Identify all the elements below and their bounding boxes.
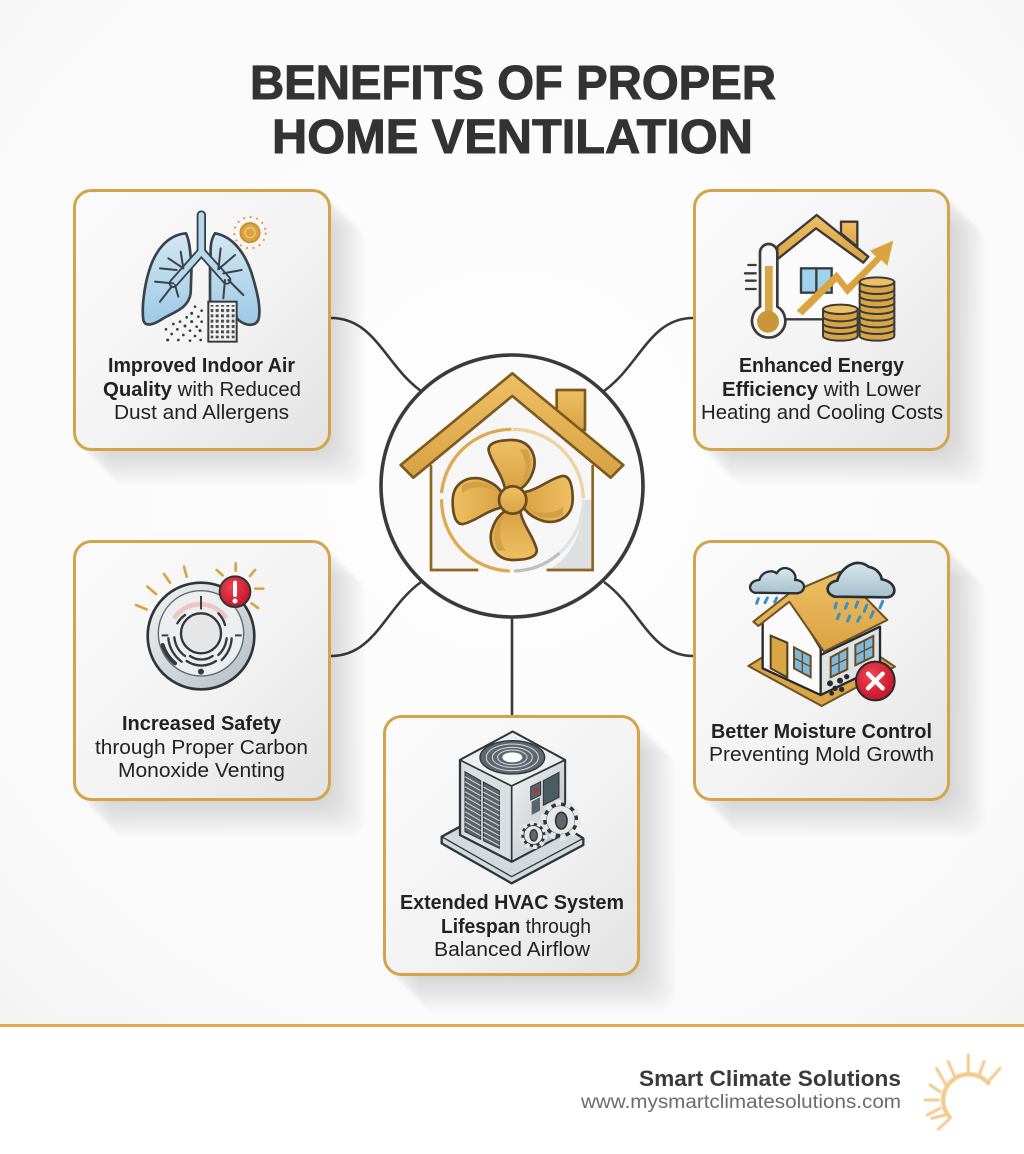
panel: better moisture control <box>694 542 985 836</box>
title: BENEFITS OF PROPER <box>250 57 776 110</box>
text: extended hvac lifespan: Balanced Airflow <box>434 939 591 961</box>
text: increased safety: Increased Safety <box>122 713 282 735</box>
text: enhanced energy efficiency: Efficiency with Lower <box>722 379 921 401</box>
footer url: www.mysmartclimatesolutions.com <box>580 1092 901 1113</box>
footer brand name: Smart Climate Solutions <box>639 1066 901 1091</box>
panel: enhanced energy efficiency <box>694 190 985 485</box>
icon: house in rain with warning <box>748 563 895 706</box>
text: better moisture control: Better Moisture Control <box>711 721 932 743</box>
icon: sun logo <box>925 1055 1000 1129</box>
connector lines <box>331 318 693 715</box>
text: better moisture control: Preventing Mold Growth <box>709 744 934 766</box>
text: improved indoor air quality <box>103 355 301 424</box>
icon: house with fan <box>401 373 623 571</box>
central hub: house with fan <box>381 355 643 617</box>
text: enhanced energy efficiency: Enhanced Energy <box>739 355 905 377</box>
text: enhanced energy efficiency <box>701 355 943 424</box>
text: extended hvac lifespan: Extended HVAC System <box>400 892 624 914</box>
text: improved indoor air quality: Improved Indoor Air <box>108 355 295 377</box>
text: increased safety: through Proper Carbon <box>95 737 308 759</box>
text: better moisture control <box>709 721 934 766</box>
icon: carbon monoxide detector <box>136 563 263 689</box>
icon: house, thermometer and coins <box>745 215 894 341</box>
panel: increased safety <box>74 542 365 836</box>
text: extended hvac lifespan <box>400 892 624 961</box>
title: HOME VENTILATION <box>272 111 753 164</box>
text: increased safety: Monoxide Venting <box>118 760 285 782</box>
text: improved indoor air quality: Dust and Allergens <box>114 402 289 424</box>
text: extended hvac lifespan: Lifespan through <box>441 916 591 938</box>
text: increased safety <box>95 713 308 782</box>
footer band <box>0 1024 1024 1154</box>
icon: hvac unit with gears <box>442 732 583 883</box>
panel: improved indoor air quality <box>74 190 365 485</box>
title <box>250 57 776 164</box>
panel: extended hvac lifespan <box>384 716 675 1011</box>
text: enhanced energy efficiency: Heating and Cooling Costs <box>701 402 943 424</box>
text: improved indoor air quality: Quality with Reduced <box>103 379 301 401</box>
icon: lungs with filter <box>143 215 266 342</box>
